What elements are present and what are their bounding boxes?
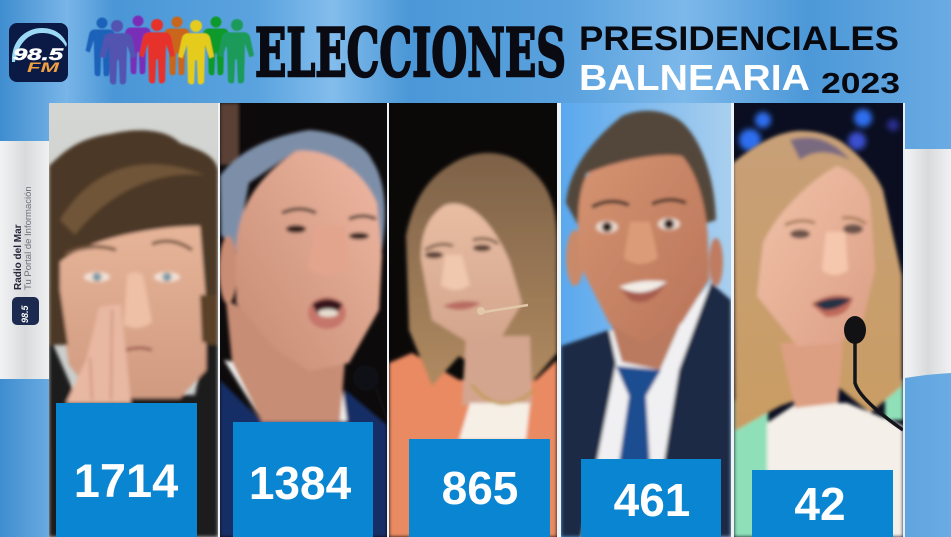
brows [282, 209, 376, 219]
value box: 1714 [56, 403, 197, 537]
brows [592, 200, 686, 207]
watermark: Radio del Mar [12, 186, 39, 325]
nose [624, 222, 658, 264]
value box: 1384 [233, 422, 373, 537]
eyes [596, 218, 680, 233]
shirt [582, 283, 711, 537]
panel: candidate 1 photo [49, 103, 218, 537]
suit [561, 283, 731, 537]
watermark: Radio del Mar: Radio del Mar [13, 224, 24, 290]
panel: candidate 4 photo [561, 103, 731, 537]
hair [566, 111, 716, 225]
value box: 865: 865 [442, 462, 518, 514]
stage lights [739, 109, 899, 151]
microphone [353, 365, 388, 422]
nose [311, 262, 316, 270]
tie [614, 364, 662, 459]
brows [425, 239, 498, 250]
neck [610, 320, 682, 370]
value box: 42 [752, 470, 893, 537]
shirt [224, 360, 347, 421]
value box: 1714: 1714 [74, 454, 178, 507]
hair [733, 131, 902, 431]
face [757, 166, 875, 346]
ear [219, 236, 237, 304]
eyes [425, 244, 491, 258]
logo: 98.5 FM: FM [27, 59, 60, 75]
face [236, 151, 382, 371]
watermark: Radio del Mar: Tu Portal de Información [23, 186, 34, 290]
brows [66, 241, 192, 254]
necklace [472, 385, 534, 404]
eyes [286, 225, 369, 240]
jacket [220, 380, 387, 537]
panel: candidate 2 photo [219, 103, 388, 537]
jacket [389, 353, 557, 537]
face [60, 226, 206, 398]
value box: 865 [409, 439, 550, 537]
nose [822, 232, 848, 275]
panel: candidate 5 photo [733, 103, 903, 537]
value box: 461: 461 [614, 474, 690, 526]
neck [462, 336, 532, 405]
watermark: Radio del Mar: 98.5 [20, 304, 30, 323]
nose [124, 272, 152, 328]
face [578, 155, 709, 343]
heading: PRESIDENCIALES: PRESIDENCIALES [579, 20, 899, 58]
logo: 98.5 FM: 98.5 [13, 45, 64, 64]
neck [780, 343, 843, 408]
sideburns [56, 292, 70, 346]
nose [441, 255, 470, 290]
hands [66, 304, 131, 403]
heading: 2023: 2023 [821, 68, 900, 100]
eyes [84, 272, 180, 282]
value box: 42: 42 [794, 478, 846, 530]
value box: 1384: 1384 [249, 457, 352, 509]
top [459, 403, 530, 440]
hair [406, 153, 557, 386]
mouth [443, 301, 481, 310]
clothing [49, 335, 218, 537]
neck [226, 300, 345, 422]
hair [220, 130, 385, 252]
ears [566, 230, 723, 286]
value box: 461 [581, 459, 721, 537]
microphone [844, 316, 903, 430]
mouth [126, 348, 152, 350]
panel: candidate 3 photo [389, 103, 557, 537]
brows [785, 218, 866, 225]
heading: BALNEARIA: BALNEARIA [579, 57, 810, 98]
mouth [811, 295, 853, 317]
logo: 98.5 FM [9, 23, 68, 82]
mouth [619, 281, 667, 302]
icon: rainbow row of people [86, 16, 254, 84]
jacket [734, 400, 768, 537]
eyes [790, 224, 863, 238]
microphone: headset [477, 305, 528, 315]
mouth [308, 297, 346, 329]
top [767, 403, 903, 537]
hair [49, 130, 218, 345]
face [421, 203, 522, 341]
title: ELECCIONES: ELECCIONES [255, 14, 566, 92]
